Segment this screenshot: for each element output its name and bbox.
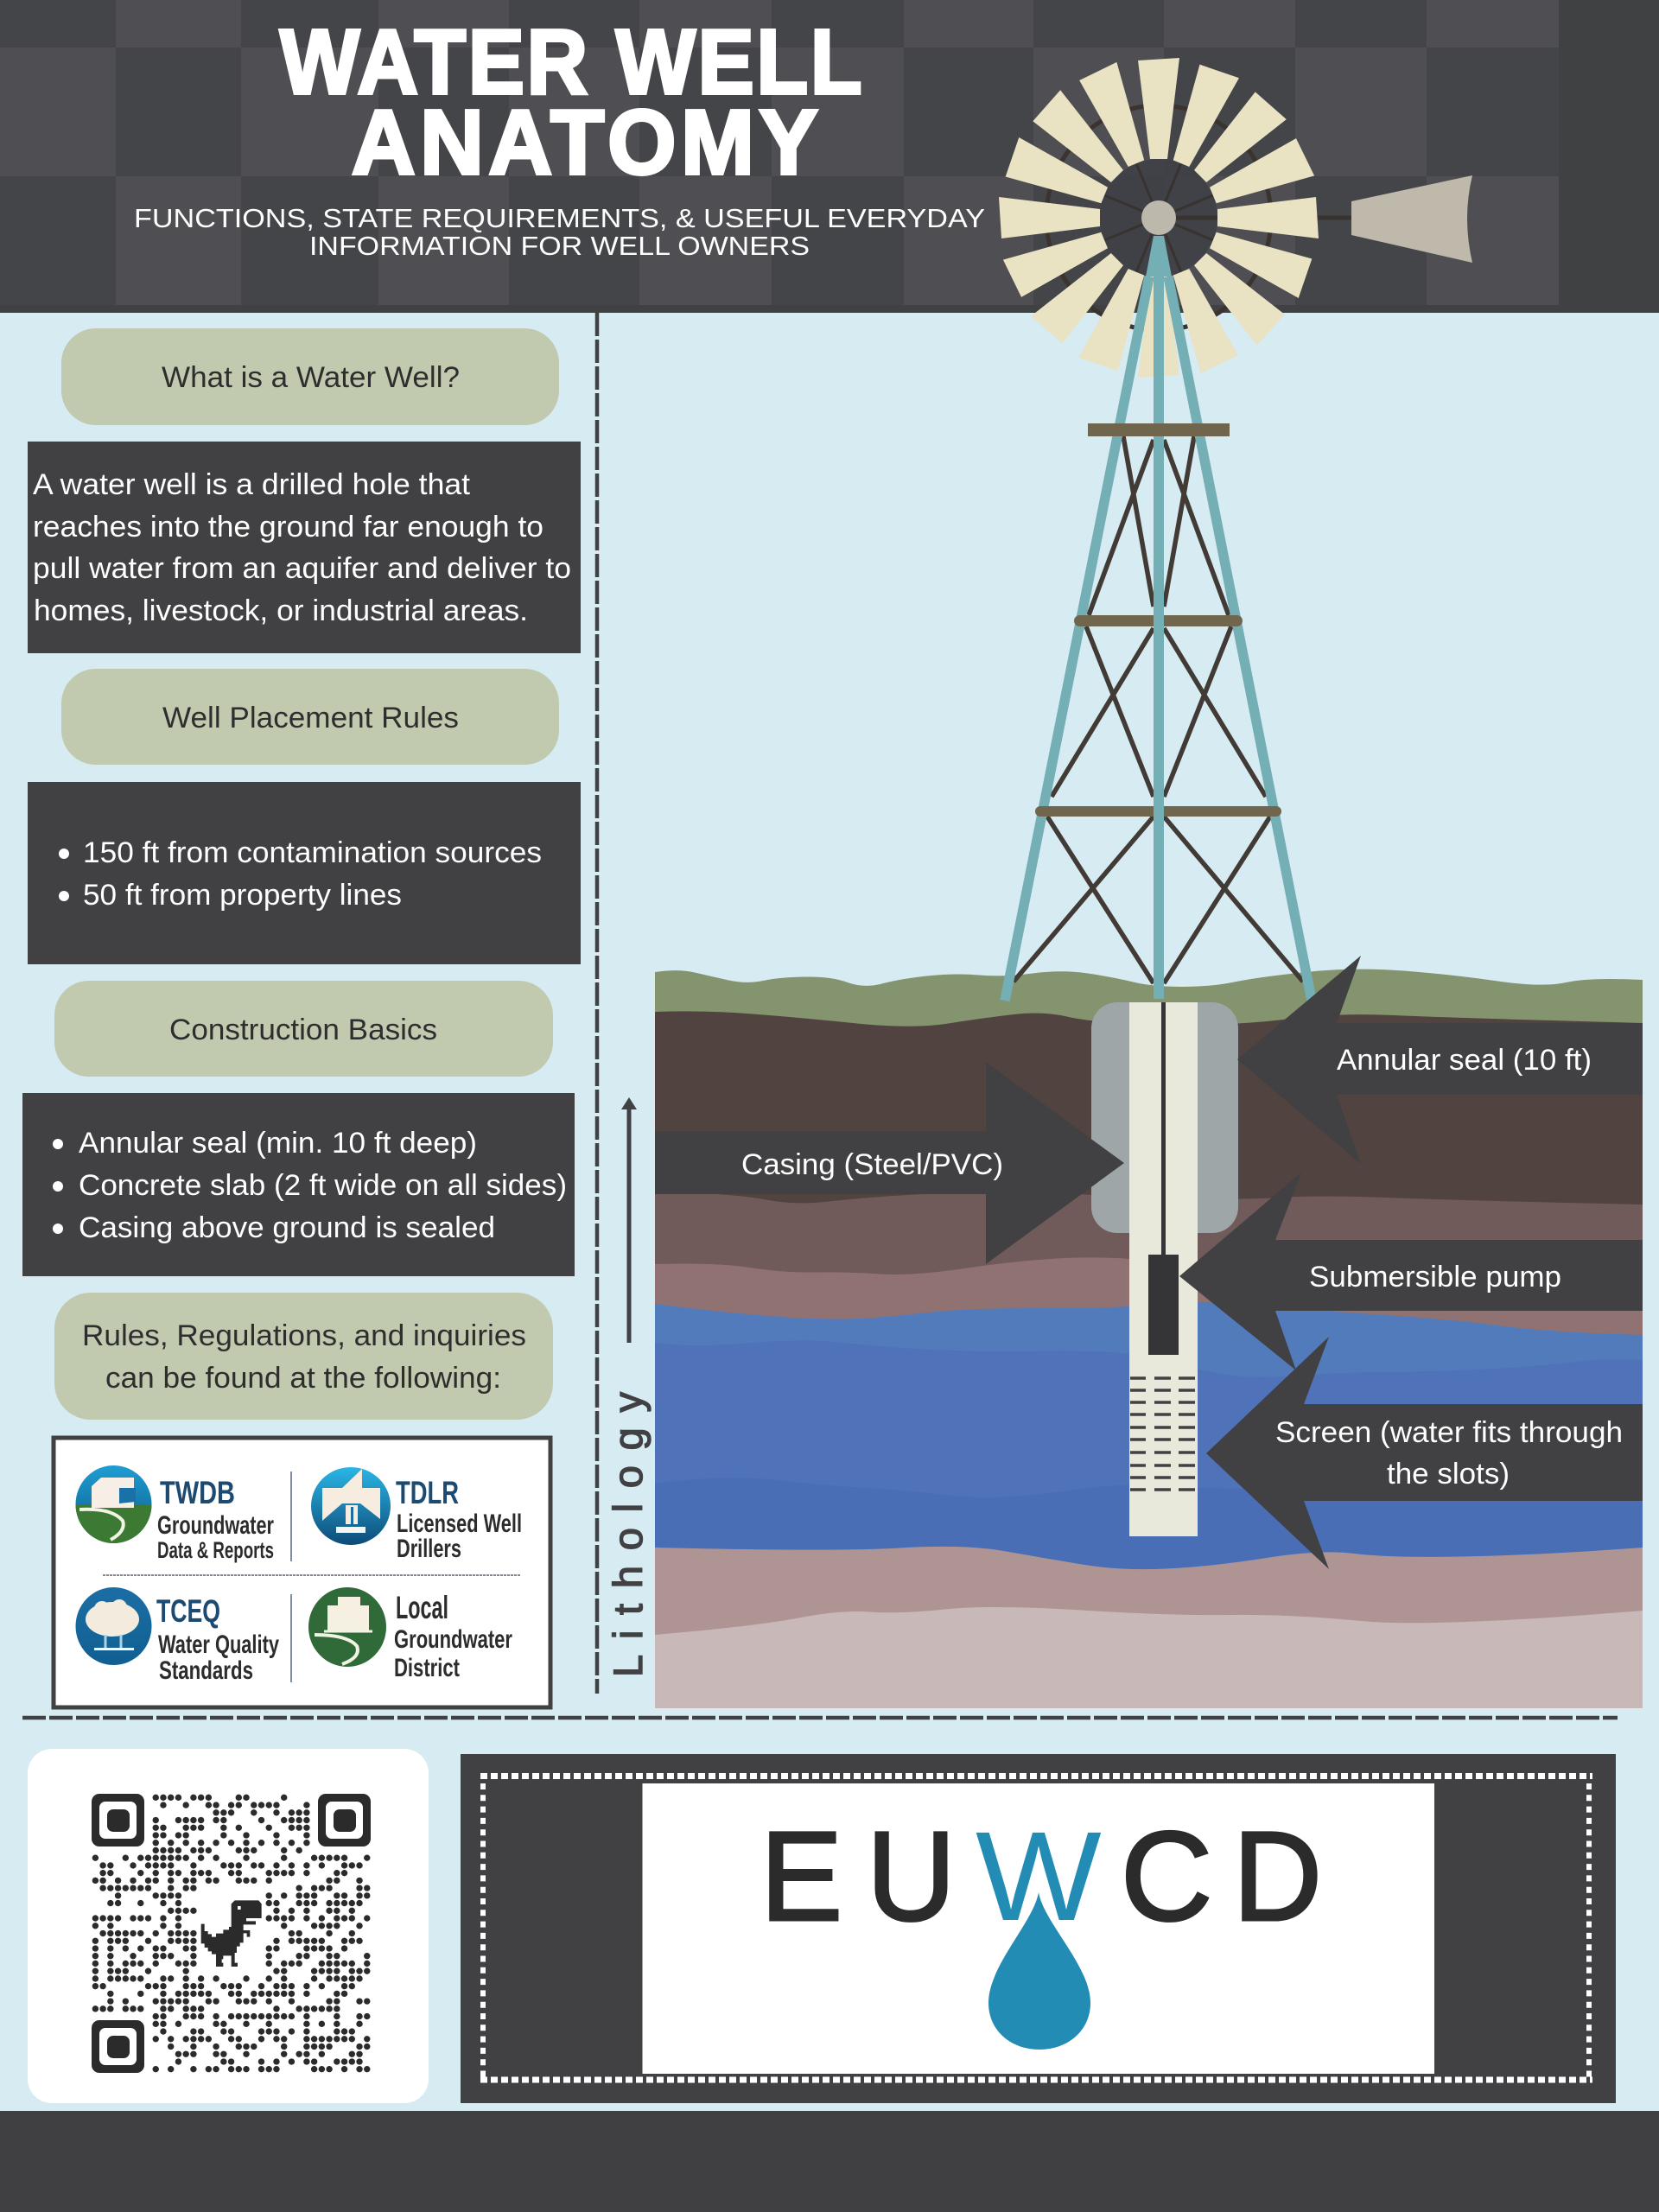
panel: definition text: A water well is a drilled hole that [33,468,470,501]
tower legs [1005,276,1312,1001]
logo text: TCEQ [156,1593,279,1685]
title: ANATOMY [352,92,818,194]
pump rod [1161,1002,1166,1255]
icon: local district [308,1587,386,1667]
panel: definition text: homes, livestock, or industrial areas. [34,594,528,627]
submersible pump [1148,1255,1179,1355]
lithology arrow [621,1097,637,1343]
logo text: TWDB: Data & Reports [157,1537,274,1563]
tower neck [1146,236,1172,276]
panel: placement rules list: 150 ft from contamination sources [83,836,542,869]
arrow: screen: Screen (water fits through [1275,1416,1623,1449]
panel: construction list: Annular seal (min. 10 ft deep) [79,1127,477,1160]
tower cross bar lower [1035,806,1281,817]
panel: definition text: pull water from an aquifer and deliver to [33,552,571,585]
well casing and seal [1091,1002,1238,1536]
icon: TCEQ [76,1587,152,1665]
windmill tail vane [1351,175,1472,263]
subtitle: FUNCTIONS, STATE REQUIREMENTS, & USEFUL EVERYDAY [134,203,985,233]
logo text: TCEQ: Standards [159,1656,253,1685]
icon: dinosaur [201,1900,262,1967]
logo text: TDLR: TDLR [396,1475,459,1510]
arrow: submersible pump: Submersible pump [1309,1261,1561,1294]
well pipe [1129,1002,1198,1536]
panel: EUWCD logo [461,1754,1616,2103]
logo text: local district [394,1590,512,1682]
geology cross-section [655,969,1643,1708]
EUWCD wordmark: C [1121,1806,1212,1948]
title: WATER WELL [280,10,861,113]
pill: construction basics: Construction Basics [169,1014,437,1046]
logo backdrop [643,1783,1434,2074]
icon: TDLR [311,1467,391,1545]
pill: well placement rules [61,669,559,765]
screen slots [1130,1378,1195,1490]
layer: pink rock [655,1257,1643,1469]
arrow: annular seal: Annular seal (10 ft) [1337,1044,1592,1077]
panel: QR code [28,1749,429,2103]
lithology label: Lithology [605,1391,651,1677]
EUWCD wordmark: E [760,1805,842,1947]
logo text: local district: District [394,1654,460,1682]
tower cross bar upper [1088,423,1230,436]
panel: construction list [22,1093,575,1276]
pill: what is a water well [61,328,559,425]
arrow: screen [1206,1337,1643,1569]
logo text: TDLR: Drillers [397,1535,461,1563]
logo text: TWDB [157,1475,274,1563]
wheel blades [999,58,1319,378]
logo text: TCEQ: Water Quality [158,1630,279,1659]
layer: brown rock [655,1191,1643,1382]
panel: construction list: Concrete slab (2 ft wide on all sides) [79,1169,567,1202]
arrow: annular seal [1237,956,1643,1164]
arrow: submersible pump [1179,1173,1643,1370]
tower mast [1154,259,1164,999]
panel: placement rules list [28,782,581,964]
QR data modules [95,1797,367,2069]
subtitle: INFORMATION FOR WELL OWNERS [309,231,810,261]
annular seal [1091,1002,1238,1233]
layer: aquifer middle [655,1340,1643,1573]
dashed divider vertical [595,313,599,1694]
icon: TWDB [73,1465,156,1545]
layer: tan clay [655,1547,1643,1708]
tower cross bracing [1014,436,1303,983]
title [280,10,861,194]
panel: construction list: Casing above ground is sealed [79,1211,495,1244]
panel: placement rules list: 50 ft from property lines [83,879,402,912]
logo text: TWDB: TWDB [160,1475,235,1510]
EUWCD wordmark [760,1805,1322,1948]
layer: aquifer lower [655,1478,1643,1599]
subtitle [134,203,985,261]
pill: what is a water well: What is a Water Well? [162,361,460,394]
pill: rules and regulations: can be found at the following: [105,1362,501,1395]
logo text: TCEQ: TCEQ [156,1593,220,1629]
windmill hub [1141,200,1176,235]
wheel ring [1046,105,1271,330]
panel: definition text [28,442,581,653]
EUWCD wordmark: D [1233,1805,1322,1947]
arrow: screen: the slots) [1387,1458,1510,1491]
logo text: local district: Local [396,1590,448,1625]
header band [0,0,1659,313]
dashed divider horizontal [22,1716,1618,1719]
icon: water drop [988,1892,1090,2050]
wheel hub disk [1100,159,1217,276]
windmill wheel [999,58,1472,378]
logo text: local district: Groundwater [394,1625,512,1654]
layer: pale bedrock [655,1607,1643,1708]
dotted frame [480,1777,1592,2080]
footer band [0,2111,1659,2212]
layer: aquifer upper [655,1302,1643,1555]
arrow: casing: Casing (Steel/PVC) [741,1148,1003,1181]
pill: rules and regulations [54,1293,553,1420]
pill: rules and regulations: Rules, Regulations, and inquiries [82,1319,526,1352]
wheel spokes [1104,163,1351,272]
logo text: TDLR: Licensed Well [397,1510,522,1538]
layer: topsoil [655,969,1643,1123]
logo text: TDLR [396,1475,522,1563]
EUWCD wordmark: U [867,1805,956,1947]
tower cross bar middle [1074,615,1243,626]
logo text: TWDB: Groundwater [157,1511,274,1540]
arrow: casing [655,1062,1124,1264]
panel: agency logos [54,1438,550,1707]
EUWCD wordmark: W [976,1805,1102,1947]
panel: definition text: reaches into the ground far enough to [33,511,543,543]
pill: construction basics [54,981,553,1077]
windmill tower [1005,236,1312,1001]
QR finder patterns [92,1794,371,2073]
pill: well placement rules: Well Placement Rules [162,702,459,734]
layer: dark soil [655,1011,1643,1296]
